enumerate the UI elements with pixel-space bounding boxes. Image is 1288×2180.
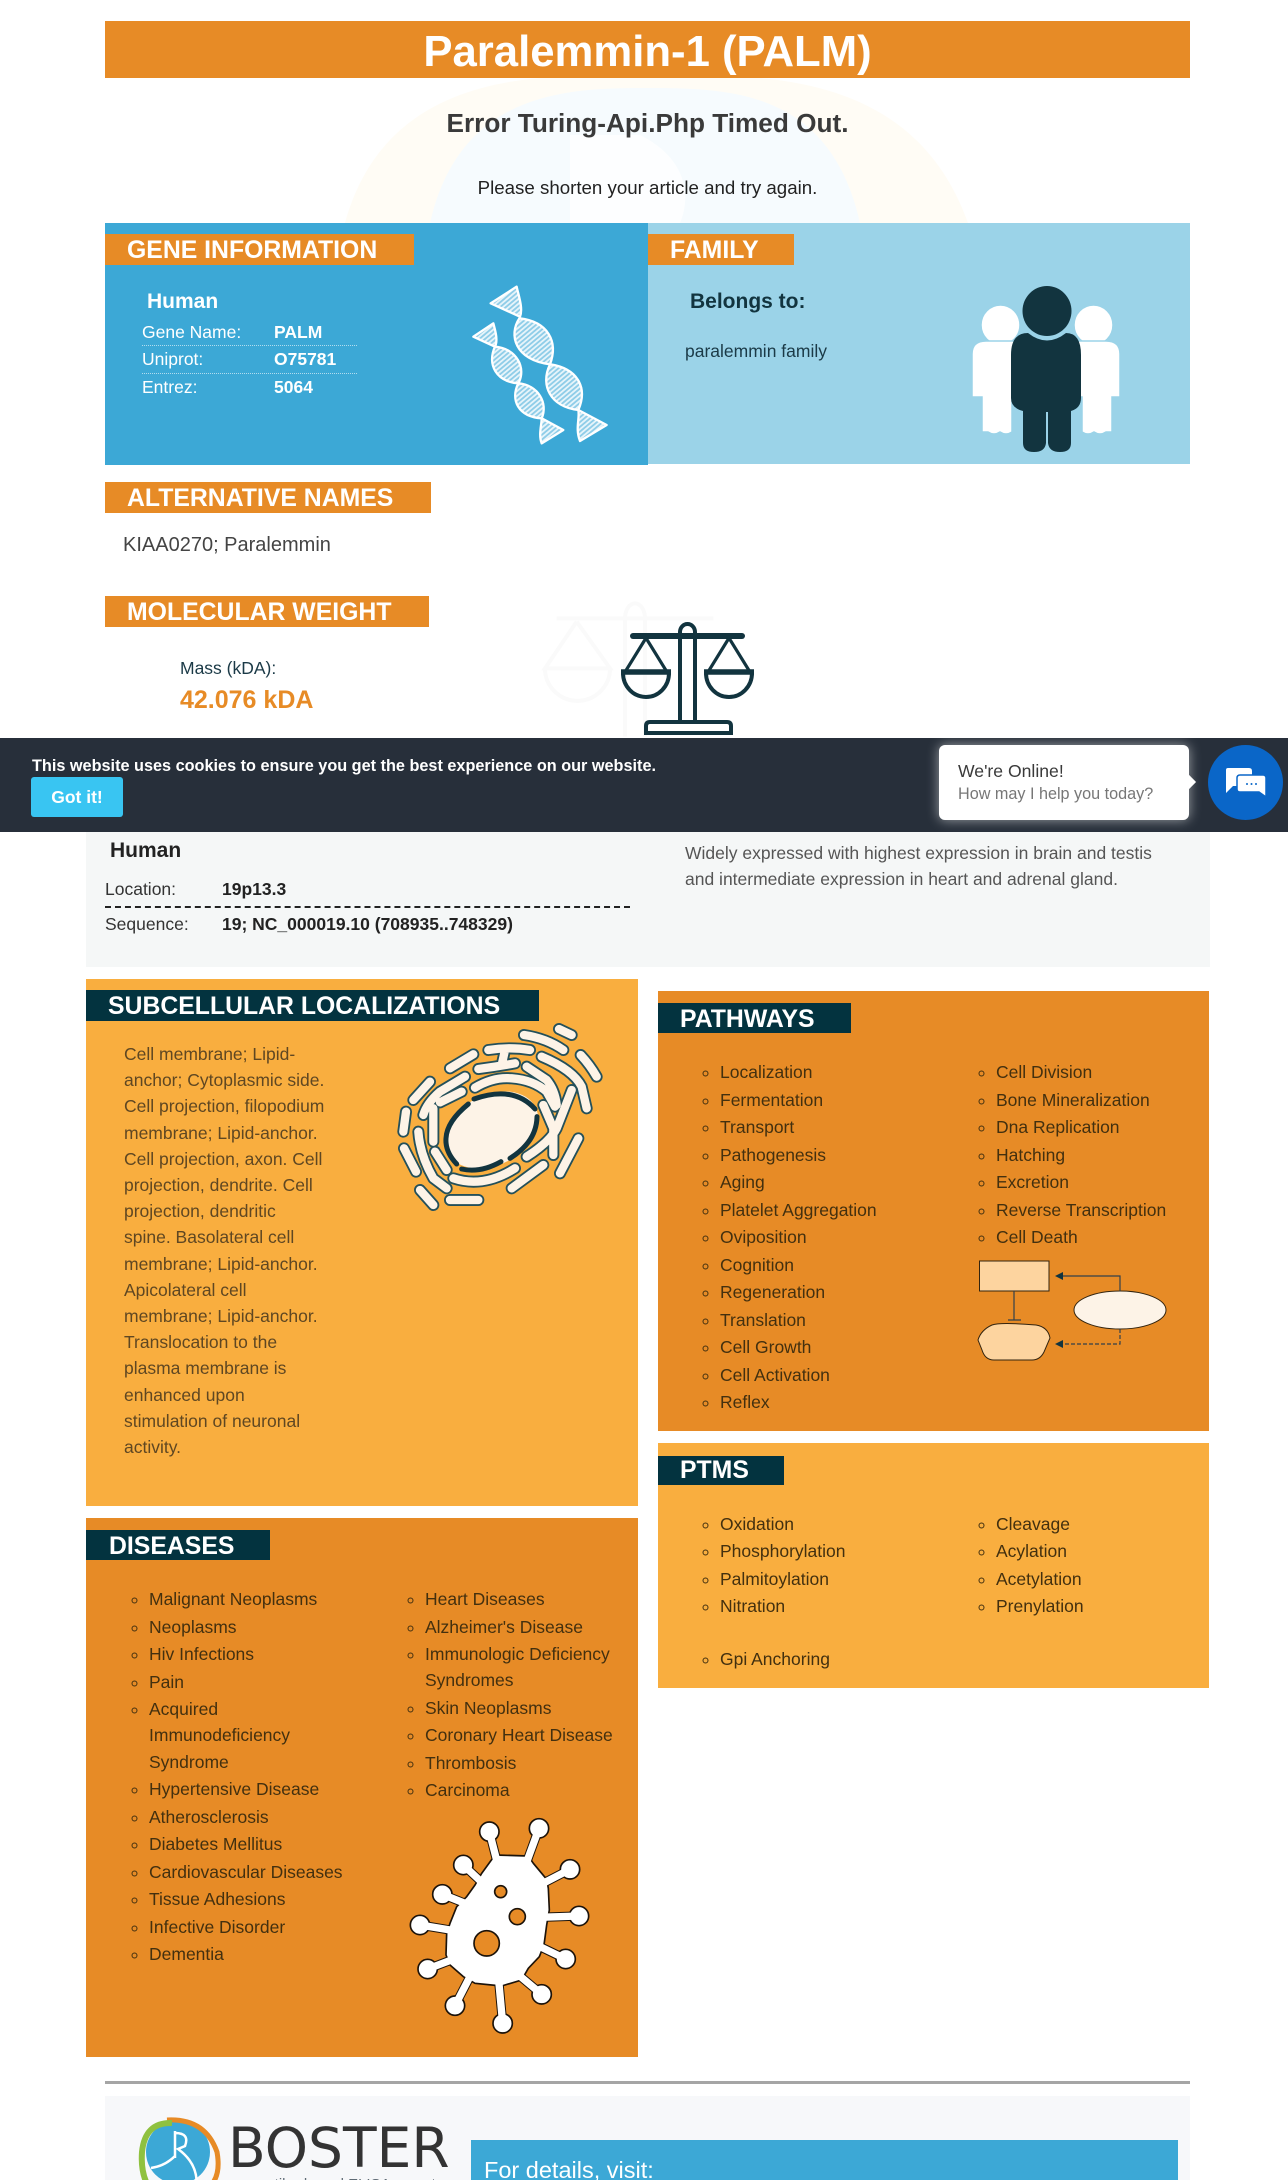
expression text: and intermediate expression in heart and adrenal gland. — [685, 869, 1118, 889]
diseases list, left column: Immunodeficiency — [149, 1725, 290, 1745]
pathways list, left column: Aging — [720, 1172, 765, 1192]
ptms list, right column: Prenylation — [996, 1596, 1084, 1616]
localization text: Cell membrane; Lipid- — [124, 1044, 295, 1064]
heading: ptms: PTMS — [680, 1457, 749, 1484]
heading: family: FAMILY — [670, 237, 759, 264]
localization text: enhanced upon — [124, 1385, 245, 1405]
gene name row — [142, 319, 357, 346]
panel: ptms — [658, 1443, 1209, 1688]
diseases list, right column — [408, 1589, 613, 1800]
diseases list, left column: Infective Disorder — [149, 1916, 285, 1936]
ptms list, left column: Phosphorylation — [720, 1541, 846, 1561]
localization text: spine. Basolateral cell — [124, 1227, 294, 1247]
entrez row: Entrez: — [142, 377, 197, 397]
pathways list, left column: Transport — [720, 1117, 794, 1137]
heading: subcellular localizations: SUBCELLULAR LOCALIZATIONS — [108, 993, 500, 1020]
panel: expression and gene location: 19p13.3 — [222, 879, 286, 899]
diseases list, left column: Dementia — [149, 1944, 224, 1964]
uniprot row: Uniprot: — [142, 349, 203, 369]
panel: expression and gene location: 19; NC_000019.10 (708935..748329) — [222, 914, 513, 934]
gene name row: Gene Name: — [142, 322, 241, 342]
localization text: stimulation of neuronal — [124, 1411, 300, 1431]
pathways list, right column: Bone Mineralization — [996, 1090, 1150, 1110]
icon: virus — [410, 1818, 590, 2034]
heading: diseases — [86, 1530, 270, 1560]
diseases list, right column: Heart Diseases — [425, 1589, 545, 1609]
entrez row — [142, 377, 313, 397]
entrez row: 5064 — [274, 377, 313, 397]
ptms list, left column: Oxidation — [720, 1514, 794, 1534]
panel: footer — [105, 2096, 1190, 2180]
logo: boster: BOSTER — [228, 2116, 450, 2180]
species label: Human — [147, 290, 218, 313]
pathways list, right column: Dna Replication — [996, 1117, 1120, 1137]
pathways list, left column — [702, 1062, 877, 1412]
location row: Location: — [105, 879, 176, 899]
diseases list, left column: Acquired — [149, 1699, 218, 1719]
ptms list, left column: Palmitoylation — [720, 1568, 829, 1588]
location row — [105, 879, 286, 899]
pathways list, left column: Cell Activation — [720, 1364, 830, 1384]
localization text: anchor; Cytoplasmic side. — [124, 1070, 324, 1090]
ptms list, right column — [978, 1514, 1084, 1616]
diseases list, left column: Hypertensive Disease — [149, 1779, 319, 1799]
heading: molecular weight: MOLECULAR WEIGHT — [127, 599, 391, 626]
diseases list, left column: Neoplasms — [149, 1616, 237, 1636]
icon: faint scale watermark — [530, 590, 770, 740]
localization text: Cell projection, filopodium — [124, 1096, 324, 1116]
pathways list, left column: Translation — [720, 1310, 806, 1330]
localization text: Apicolateral cell — [124, 1280, 247, 1300]
panel: subcellular localizations — [86, 979, 638, 1506]
button: got it — [31, 777, 123, 817]
dashed divider — [105, 906, 630, 908]
error heading: Error Turing-Api.Php Timed Out. — [446, 108, 849, 138]
diseases list, left column: Pain — [149, 1672, 184, 1692]
localization text: membrane; Lipid-anchor. — [124, 1123, 318, 1143]
chat prompt: How may I help you today? — [958, 785, 1153, 803]
pathways list, right column: Hatching — [996, 1144, 1065, 1164]
background watermark — [345, 78, 968, 223]
localization text: projection, dendrite. Cell — [124, 1175, 313, 1195]
localization text: membrane; Lipid-anchor. — [124, 1254, 318, 1274]
diseases list, left column — [132, 1589, 343, 1964]
localization text: membrane; Lipid-anchor. — [124, 1306, 318, 1326]
species label: Human — [110, 839, 181, 862]
diseases list, left column: Cardiovascular Diseases — [149, 1862, 343, 1882]
heading: pathways: PATHWAYS — [680, 1006, 815, 1033]
icon: pathway diagram — [978, 1260, 1166, 1360]
panel: diseases — [86, 1518, 638, 2057]
expression text — [685, 843, 1152, 889]
pathways list, left column: Oviposition — [720, 1227, 807, 1247]
localization text: activity. — [124, 1437, 181, 1457]
diseases list, left column: Hiv Infections — [149, 1644, 254, 1664]
pathways list, left column: Localization — [720, 1062, 812, 1082]
gene name row: PALM — [274, 322, 322, 342]
diseases list, right column: Carcinoma — [425, 1780, 510, 1800]
uniprot row — [142, 346, 357, 374]
title — [105, 21, 1190, 78]
localization text: plasma membrane is — [124, 1358, 286, 1378]
sequence row — [105, 914, 513, 934]
mass label: Mass (kDA): — [180, 658, 276, 678]
ptms list, left column: Nitration — [720, 1596, 785, 1616]
ptms list, right column: Acetylation — [996, 1568, 1082, 1588]
icon: chat button — [1208, 745, 1283, 820]
uniprot row: O75781 — [274, 349, 336, 369]
localization text: projection, dendritic — [124, 1201, 276, 1221]
alternative names text: KIAA0270; Paralemmin — [123, 534, 331, 556]
ptms list, left column — [702, 1514, 846, 1616]
diseases list, right column: Syndromes — [425, 1670, 514, 1690]
pathways list, right column: Cell Division — [996, 1062, 1092, 1082]
diseases list, right column: Thrombosis — [425, 1753, 516, 1773]
pathways list, left column: Reflex — [720, 1392, 770, 1412]
chat bubble — [939, 745, 1189, 820]
ptms list, last item: Gpi Anchoring — [720, 1649, 830, 1669]
call to action box — [471, 2140, 1178, 2180]
pathways list, left column: Platelet Aggregation — [720, 1200, 877, 1220]
panel: family — [648, 223, 1190, 464]
pathways list, left column: Cell Growth — [720, 1337, 811, 1357]
diseases list, right column: Immunologic Deficiency — [425, 1644, 610, 1664]
title: Paralemmin-1 (PALM) — [423, 27, 872, 76]
diseases list, right column: Coronary Heart Disease — [425, 1725, 613, 1745]
pathways list, left column: Regeneration — [720, 1282, 825, 1302]
belongs to label: Belongs to: — [690, 290, 806, 313]
heading: alternative names: ALTERNATIVE NAMES — [127, 485, 393, 512]
icon: cell organelles — [397, 1023, 603, 1211]
heading: ptms — [658, 1456, 784, 1485]
cookie message: This website uses cookies to ensure you get the best experience on our website. — [32, 757, 656, 775]
diseases list, right column: Skin Neoplasms — [425, 1698, 551, 1718]
localization text: Translocation to the — [124, 1332, 277, 1352]
icon: dna helix — [472, 286, 608, 444]
pathways list, right column: Reverse Transcription — [996, 1200, 1166, 1220]
diseases list, left column: Atherosclerosis — [149, 1806, 269, 1826]
pathways list, right column — [978, 1062, 1166, 1247]
ptms list, right column: Cleavage — [996, 1514, 1070, 1534]
diseases list, left column: Syndrome — [149, 1752, 229, 1772]
heading: gene information: GENE INFORMATION — [127, 237, 377, 264]
pathways list, right column: Cell Death — [996, 1227, 1078, 1247]
localization text: Cell projection, axon. Cell — [124, 1149, 322, 1169]
pathways list, left column: Pathogenesis — [720, 1144, 826, 1164]
pathways list, left column: Fermentation — [720, 1090, 823, 1110]
expression text: Widely expressed with highest expression in brain and testis — [685, 843, 1152, 863]
icon: people — [972, 286, 1120, 452]
panel: gene information — [105, 223, 648, 465]
panel: expression and gene location — [86, 820, 1210, 967]
diseases list, left column: Tissue Adhesions — [149, 1889, 286, 1909]
heading: family — [648, 234, 794, 265]
pathways list, right column: Excretion — [996, 1172, 1069, 1192]
heading: pathways — [658, 1003, 851, 1033]
family name: paralemmin family — [685, 341, 827, 361]
chat greeting: We're Online! — [958, 761, 1064, 781]
diseases list, right column: Alzheimer's Disease — [425, 1616, 583, 1636]
localization text — [124, 1044, 324, 1457]
mass value: 42.076 kDA — [180, 686, 313, 714]
ptms list, right column: Acylation — [996, 1541, 1067, 1561]
sequence row: Sequence: — [105, 914, 189, 934]
button: got it: Got it! — [51, 787, 103, 807]
pathways list, left column: Cognition — [720, 1254, 794, 1274]
bubble pointer — [1182, 775, 1196, 789]
error message: Please shorten your article and try again. — [478, 177, 817, 198]
panel: pathways — [658, 991, 1209, 1431]
cookie banner — [0, 738, 1288, 832]
diseases list, left column: Diabetes Mellitus — [149, 1834, 282, 1854]
icon: balance scale — [621, 622, 754, 735]
diseases list, left column: Malignant Neoplasms — [149, 1589, 317, 1609]
heading: diseases: DISEASES — [109, 1533, 234, 1560]
footer divider — [105, 2081, 1190, 2084]
